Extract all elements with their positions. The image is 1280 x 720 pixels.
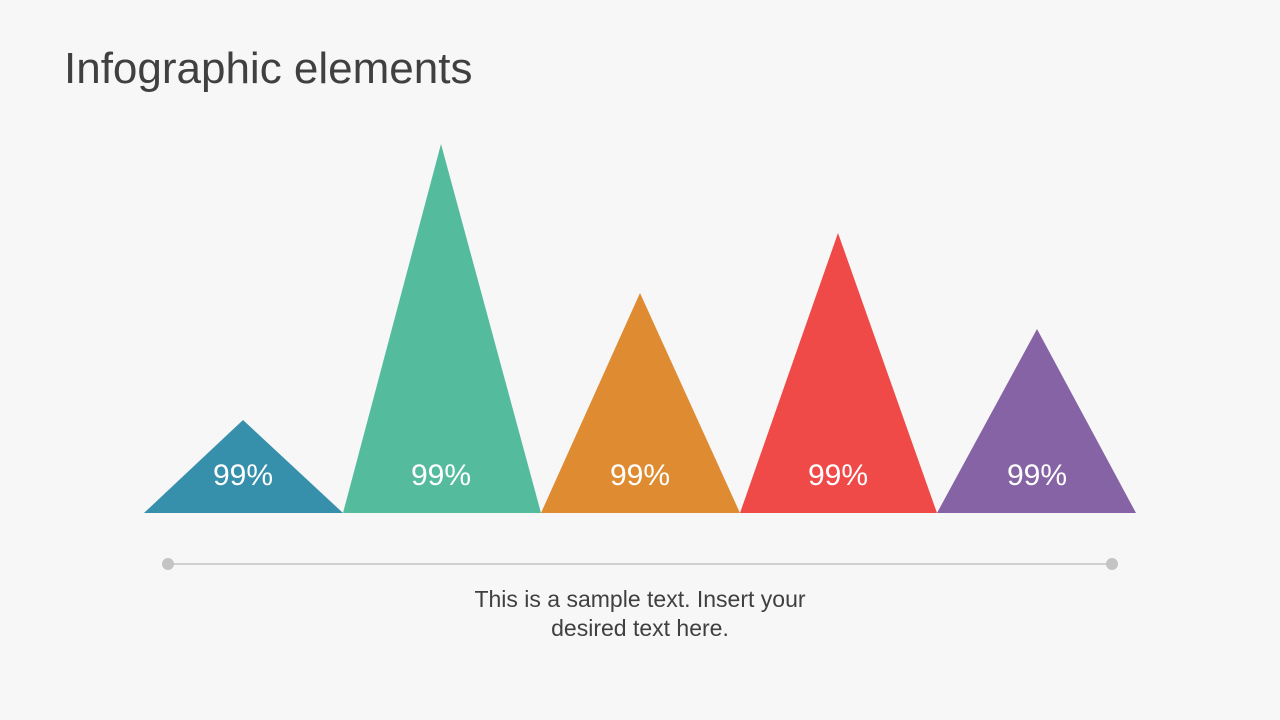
caption: This is a sample text. Insert your desired text here. — [474, 586, 806, 641]
triangle: green: 99% — [411, 459, 471, 492]
triangle: purple: 99% — [1007, 459, 1067, 492]
triangle: blue: 99% — [213, 459, 273, 492]
timeline line — [162, 558, 1118, 570]
triangle: purple — [937, 329, 1136, 513]
triangle: green — [343, 144, 541, 513]
triangle: red — [740, 233, 937, 513]
title: Infographic elements — [64, 44, 472, 93]
triangle: orange: 99% — [610, 459, 670, 492]
triangle: orange — [541, 293, 740, 513]
triangle: red: 99% — [808, 459, 868, 492]
triangle: blue — [144, 420, 343, 513]
